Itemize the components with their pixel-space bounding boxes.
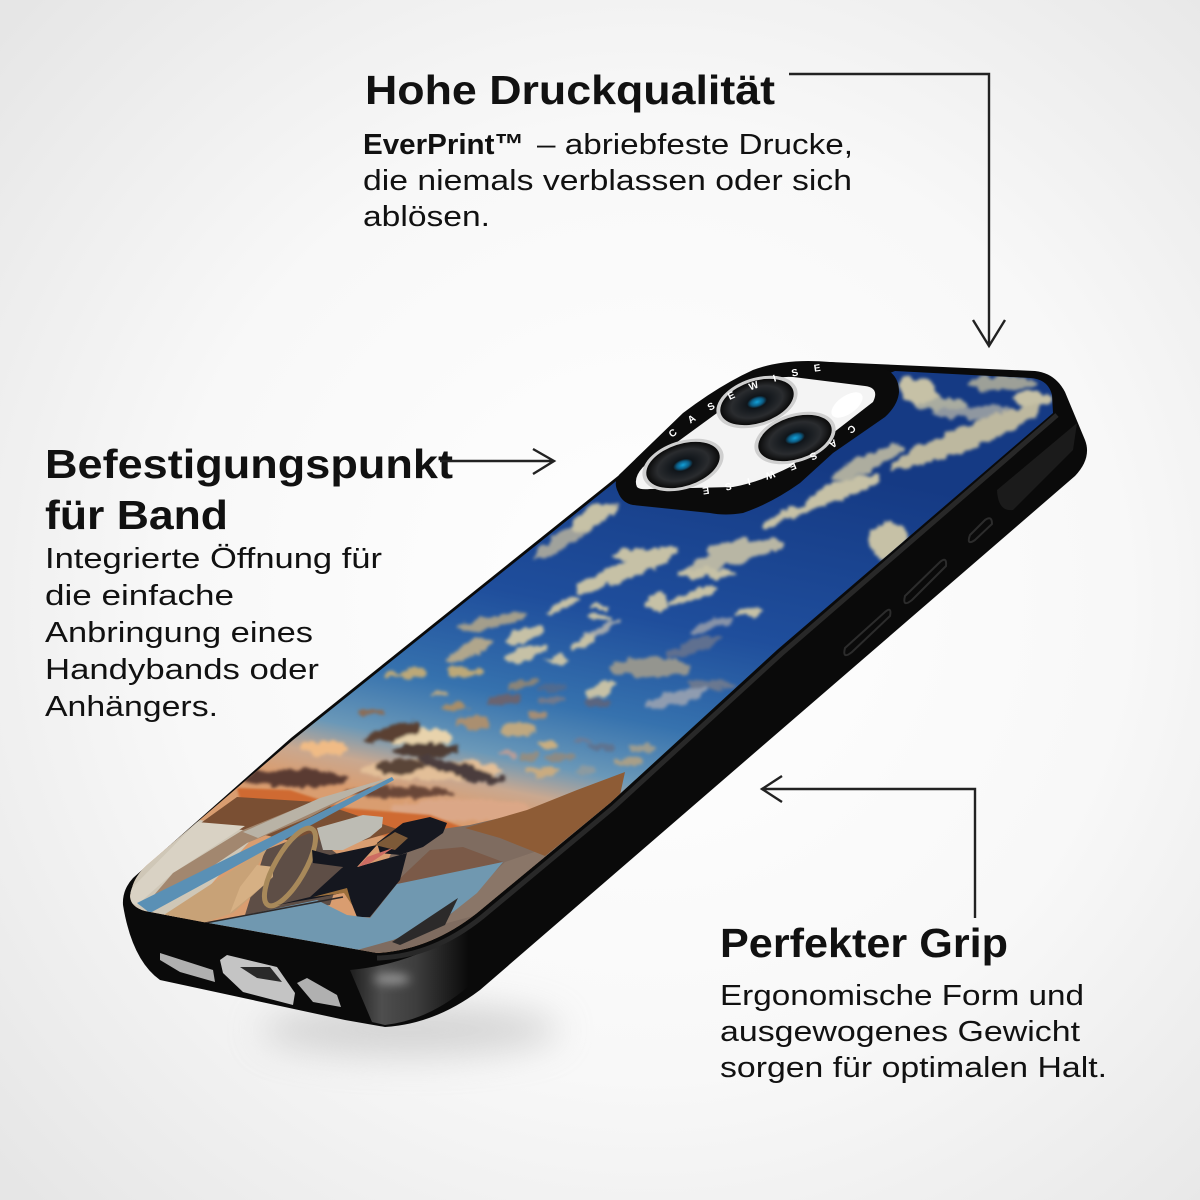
ground base: [346, 808, 604, 953]
car body: [209, 862, 503, 950]
sky: [130, 371, 1053, 953]
body text: ausgewogenes Gewicht: [720, 1016, 1080, 1048]
clouds: [383, 370, 1053, 777]
cliffs: [465, 772, 625, 856]
heading: Befestigungspunkt: [45, 441, 453, 487]
body text: [720, 980, 1107, 1084]
arrow: [762, 776, 975, 918]
rim highlight: [377, 415, 1057, 958]
charging port: [220, 955, 295, 1005]
windshield glass: [154, 795, 351, 894]
windshield frame: [243, 777, 392, 838]
lens right: [748, 402, 842, 474]
heading: [45, 441, 453, 538]
island ring: [616, 361, 899, 514]
body text: ablösen.: [363, 201, 490, 233]
body text: die einfache: [45, 580, 234, 612]
lens left: [636, 429, 730, 501]
surfboard: [137, 777, 394, 913]
body text: Ergonomische Form und: [720, 980, 1084, 1012]
tan interior: [164, 850, 273, 922]
arrow: [440, 449, 554, 474]
steering wheel: [262, 826, 318, 908]
body text: Handybands oder: [45, 654, 319, 686]
callout: grip: [720, 776, 1107, 1084]
body text: Integrierte Öffnung für: [45, 543, 382, 575]
corner glint: [374, 974, 410, 984]
left base: [130, 820, 249, 918]
white dog: [317, 815, 383, 850]
car seam: [200, 897, 343, 924]
heading: Perfekter Grip: [720, 920, 1008, 966]
road: [446, 848, 556, 923]
port opening: [240, 967, 282, 982]
bottom corner highlight: [350, 920, 478, 1025]
wheel: [392, 898, 458, 945]
speaker left: [160, 953, 215, 982]
speaker right: [297, 978, 341, 1007]
tongue: [358, 848, 393, 867]
logo bottom: CASEWISE: [702, 426, 856, 494]
body text: die niemals verblassen oder sich: [363, 165, 852, 197]
seats: [393, 847, 503, 885]
body text: – abriebfeste Drucke,: [537, 129, 853, 161]
sunset clouds: [240, 709, 530, 821]
case body: [123, 362, 1087, 1027]
heading: Hohe Druckqualität: [365, 67, 775, 113]
sea: [202, 797, 396, 842]
callout: print quality: [363, 67, 1005, 346]
artwork: [130, 371, 1053, 953]
interior behind wheel: [245, 833, 345, 915]
arrow: [789, 74, 1005, 346]
bottom ports: [160, 953, 341, 1007]
logo top: CASEWISE: [669, 364, 821, 436]
box: [230, 865, 270, 912]
body text: [45, 543, 382, 723]
body text: Anhängers.: [45, 691, 218, 723]
side strap opening: [997, 423, 1077, 510]
black dog: [277, 817, 447, 917]
horizon: [237, 788, 470, 840]
side buttons: [844, 518, 992, 655]
flash: [827, 387, 867, 423]
body text: Anbringung eines: [45, 617, 313, 649]
cream panel: [120, 822, 245, 905]
body text: sorgen für optimalen Halt.: [720, 1052, 1107, 1084]
phone shadow: [260, 1004, 560, 1056]
lens top: [710, 366, 804, 438]
body text: [363, 129, 853, 233]
phone case: [122, 361, 1088, 1027]
muzzle: [375, 832, 408, 850]
camera island: [616, 361, 899, 514]
body text: EverPrint™: [363, 129, 524, 161]
window: [636, 377, 875, 489]
dog leg: [313, 888, 352, 905]
heading: für Band: [45, 492, 228, 538]
callout: strap attachment: [45, 441, 554, 723]
